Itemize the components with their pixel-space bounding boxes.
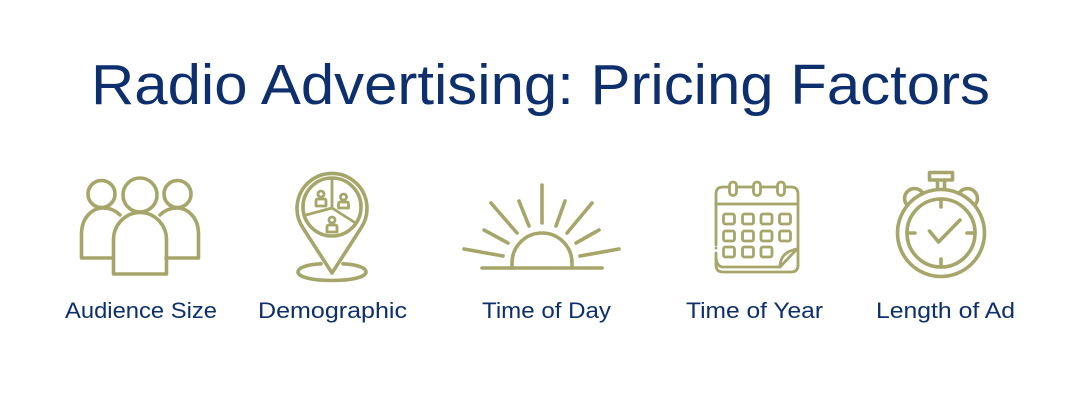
- icon: stopwatch: [898, 172, 984, 276]
- label: length of ad: Length of Ad: [876, 298, 1015, 323]
- label: audience size: Audience Size: [65, 298, 217, 323]
- factor: demographic: [258, 173, 407, 323]
- factor: length of ad: [876, 172, 1015, 323]
- icon: location pin with people: [297, 173, 367, 280]
- label: demographic: Demographic: [258, 298, 407, 323]
- icon: three people: [82, 178, 198, 274]
- title: Radio Advertising: Pricing Factors: [91, 53, 990, 117]
- icon: rising sun: [464, 185, 619, 268]
- factor: time of day: [464, 185, 619, 323]
- label: time of day: Time of Day: [482, 298, 611, 323]
- factor: audience size: [65, 178, 217, 323]
- factor: time of year: [686, 182, 823, 323]
- label: time of year: Time of Year: [686, 298, 823, 323]
- icon: calendar: [716, 182, 798, 272]
